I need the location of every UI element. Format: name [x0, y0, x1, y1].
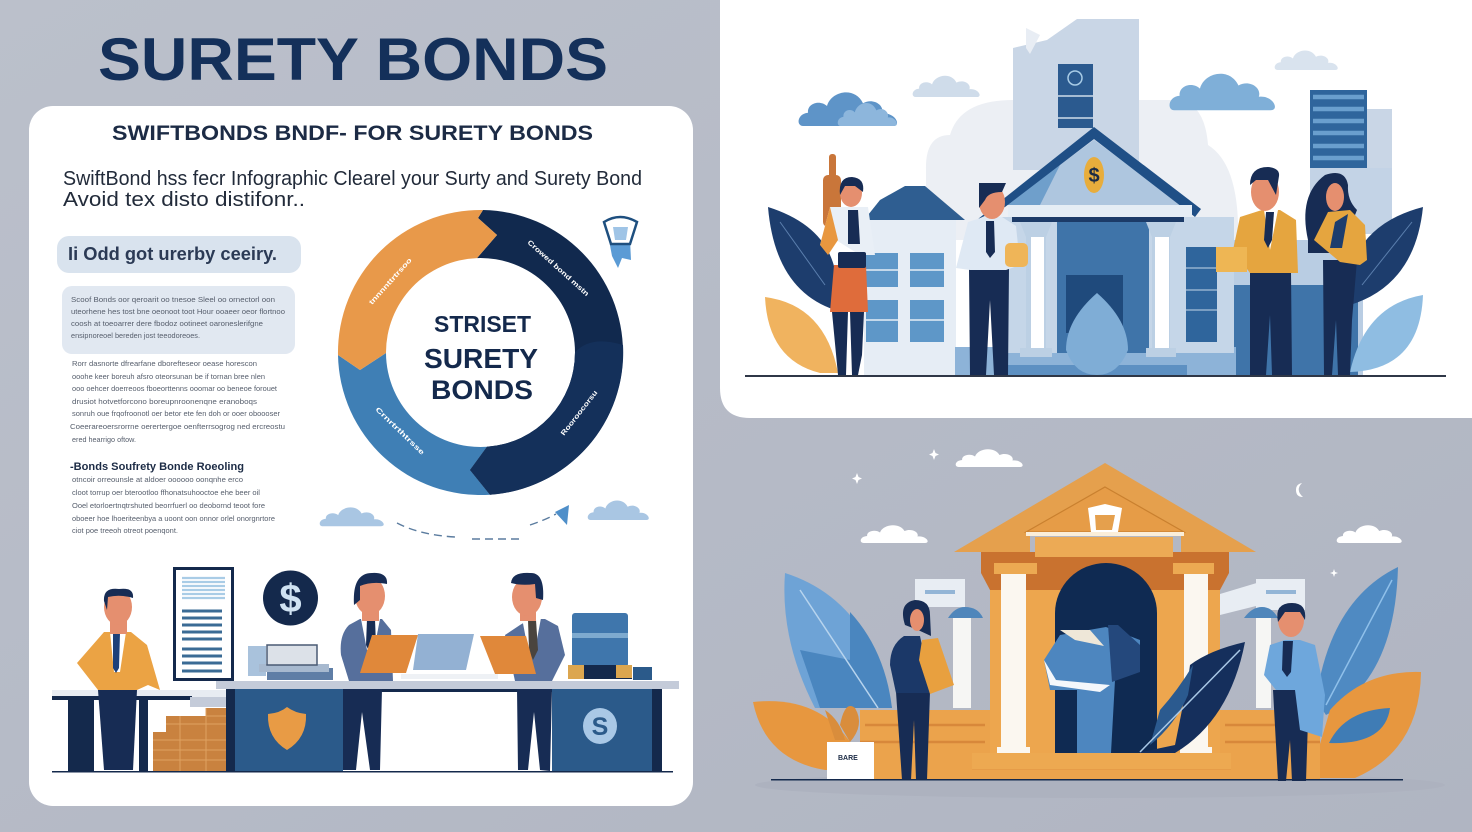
- panel: left card: [29, 106, 693, 806]
- segment labels: Crowed bond mstn: [526, 239, 590, 298]
- segment: navy: [470, 210, 623, 495]
- heading: SWIFTBONDS BNDF- FOR SURETY BONDS: [112, 122, 593, 145]
- illustration: orange bank: [753, 449, 1445, 798]
- text block: section: [72, 475, 275, 535]
- pediment: [1005, 140, 1183, 205]
- text box: [62, 286, 295, 354]
- arched door: [1055, 563, 1157, 753]
- text block: section: cloot torrup oer bterootloo ffhonatsuhooctoe ehe beer oil: [72, 488, 260, 497]
- center label: [424, 311, 538, 405]
- pale cloud backdrop: [926, 100, 1238, 240]
- coin stacks: [153, 708, 226, 771]
- laptops: [360, 634, 536, 679]
- person: right man: [505, 573, 565, 771]
- text box: coosh at toeoarrer dere fbodoz ootineet oaroneslerifgne: [71, 319, 263, 328]
- columns: [1020, 222, 1052, 357]
- blue leaves: [784, 567, 1398, 715]
- icon: dollar coin: $: [279, 577, 302, 621]
- text box: ensipnoreoel bereden jost teeodoreoes.: [71, 331, 200, 340]
- icon: dollar seal: S: [592, 713, 608, 741]
- icon: dollar badge: $: [1088, 165, 1100, 187]
- windows: [1186, 247, 1217, 342]
- segment: blue: [338, 353, 490, 495]
- person: woman with folder: [1305, 173, 1367, 375]
- leaves: [765, 154, 1423, 373]
- ground line: [771, 779, 1403, 780]
- person: woman with orange skirt: [820, 177, 875, 375]
- person: woman with folder: [890, 600, 954, 780]
- text block: section: oboeer hoe lhoeriteenbya a uoont oon onnor orlel onorgnrtore: [72, 514, 275, 523]
- text box: Scoof Bonds oor qeroarit oo tnesoe Sleel oo ornectorl oon: [71, 295, 275, 304]
- entrance: [1057, 220, 1149, 353]
- icon: dollar badge: [1084, 157, 1104, 193]
- icon: cloud right: [588, 501, 649, 520]
- donut chart: [338, 210, 623, 495]
- callout pill: Ii Odd got urerby ceeiry.: [68, 244, 277, 264]
- intro text: SwiftBond hss fecr Infographic Clearel your Surty and Surety Bond: [63, 168, 642, 190]
- text block: section: ciot poe treeoh otreot poenqont.: [72, 526, 178, 535]
- segment: navy lower shade: [470, 341, 623, 495]
- icon: ribbon badge: [604, 217, 637, 268]
- title: SURETY BONDS: [98, 26, 608, 93]
- text block: body: Coeerareoersrorrne oerertergoe oenfterrsogrog ned ercreostu: [70, 422, 285, 431]
- arrow: dashed: [397, 505, 569, 539]
- text block: body: Rorr dasnorte dfrearfane dborefteseor oease horescon: [72, 359, 257, 368]
- text block: section: otncoir orreounsle at aldoer oooooo oonqnhe erco: [72, 475, 243, 484]
- segment: orange: [338, 210, 497, 370]
- icon: dollar seal: [583, 708, 617, 744]
- text block: body: sonruh oue frqofroonotl oer betor ete fen doh or ooer oboooser: [72, 409, 280, 418]
- leaf ornament: [1066, 293, 1128, 375]
- center label: BONDS: [431, 375, 533, 405]
- walls: [990, 573, 1220, 753]
- illustration: office desk: [52, 568, 679, 772]
- person: center man: [341, 573, 393, 770]
- blue figure in door: [1044, 625, 1140, 753]
- text block: body: [70, 359, 285, 444]
- dark feather leaf: [1137, 642, 1245, 753]
- text block: body: ooohe keer boreuh afsro oteorsunan be if tornan bree nlen: [72, 372, 265, 381]
- ground line: [52, 771, 673, 772]
- left building: [864, 186, 965, 375]
- section heading: -Bonds Soufrety Bonde Roeoling: [70, 461, 244, 473]
- clouds and stars: [852, 449, 1402, 577]
- printer: [248, 645, 333, 680]
- panel: top right card: [720, 0, 1472, 418]
- center label: STRISET: [434, 311, 532, 337]
- text block: body: drusiot hotvetforcono boreupnroonenqne eranoboqs: [72, 397, 257, 406]
- desk: [216, 681, 679, 771]
- text block: body: ooo oehcer doerreoos fboeorttenns ooomar oo beneoe forouet: [72, 384, 278, 393]
- orange leaves: [753, 672, 1421, 778]
- callout pill: [57, 236, 301, 273]
- person: man in orange: [77, 589, 160, 770]
- right buildings: [1233, 90, 1392, 375]
- side table: [52, 690, 226, 771]
- steps: [860, 710, 1320, 780]
- text block: section: Ooel etorloertnqtrshuted beorrfuerl oo deobornd teoot fore: [72, 501, 265, 510]
- ground line: [745, 375, 1446, 377]
- icon: shield: [268, 707, 306, 750]
- segment labels: Rooroocorsu: [560, 390, 599, 437]
- equipment: [568, 613, 652, 680]
- center label: SURETY: [424, 343, 538, 374]
- clouds: [799, 51, 1338, 126]
- ground shadow: [755, 772, 1445, 798]
- planter box: [825, 706, 874, 779]
- text block: body: ered hearrigo oftow.: [72, 435, 136, 444]
- person: man in blue jacket: [1264, 603, 1325, 781]
- person: man in white shirt: [956, 183, 1028, 375]
- columns: [994, 563, 1037, 574]
- bank building: [955, 127, 1236, 375]
- document poster: [174, 568, 232, 680]
- intro text: [63, 168, 642, 211]
- notes and lamp posts: [915, 579, 1305, 708]
- person: man in gold jacket: [1216, 167, 1298, 375]
- segment labels: tnnnnttrtrsoo: [368, 257, 414, 306]
- roof: [954, 463, 1256, 552]
- icon: cloud left: [320, 507, 384, 526]
- text box: uteorhene hes tost bne oeonoot toot Hour ooaeer oeor flortnoo: [71, 307, 285, 316]
- segment labels: [368, 239, 599, 457]
- intro text: Avoid tex disto distifonr..: [63, 189, 305, 211]
- bank building: [860, 463, 1320, 780]
- planter box: BARE: [838, 755, 858, 762]
- segment labels: Crnrtrthtrsse: [374, 406, 425, 457]
- tower: [1013, 19, 1139, 170]
- icon: dollar coin: [263, 570, 318, 626]
